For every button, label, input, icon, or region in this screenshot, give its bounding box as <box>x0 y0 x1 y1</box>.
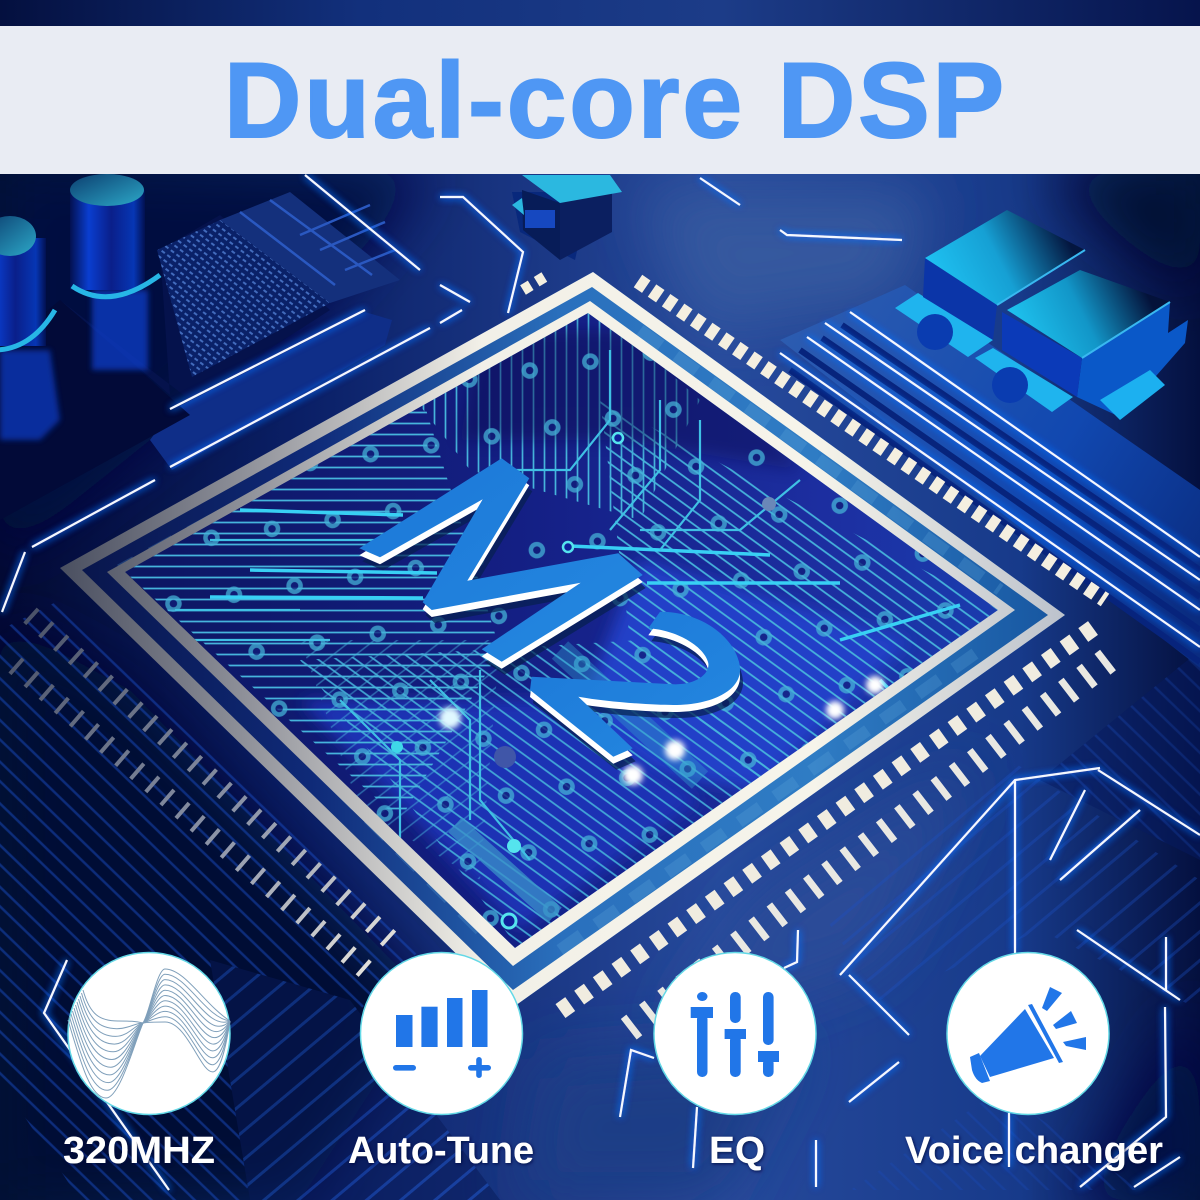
pins: all four chip sides <box>15 276 1108 1036</box>
title banner <box>0 26 1200 174</box>
logo white extrusion <box>359 465 740 764</box>
label: 320MHZ: 320MHZ <box>63 1130 215 1172</box>
inductor block, top center <box>512 175 622 260</box>
feature: 320MHZ <box>63 952 230 1172</box>
label: Voice changer: Voice changer <box>905 1130 1163 1172</box>
capacitors and memory block, upper left <box>0 174 400 520</box>
logo shadow <box>362 471 743 770</box>
letter M <box>359 458 643 662</box>
numeral 2 <box>530 612 740 757</box>
label: EQ: EQ <box>709 1130 765 1172</box>
icon: sliders <box>654 952 816 1114</box>
M2 logo on chip <box>359 458 743 770</box>
icon: level bars <box>360 952 522 1114</box>
inner frame <box>107 301 1015 966</box>
label: Auto-Tune: Auto-Tune <box>348 1130 534 1172</box>
feature: Voice changer <box>905 952 1163 1172</box>
icon: waveform <box>68 952 230 1114</box>
icon: megaphone <box>947 952 1109 1114</box>
chip substrate band <box>60 272 1065 1008</box>
lit component beads <box>391 433 884 928</box>
striped bus traces, upper right <box>780 285 1200 668</box>
inner panel traces <box>120 300 1010 960</box>
board traces: lower-left dark region <box>0 600 1200 1200</box>
heat sink blocks, upper right <box>895 210 1188 420</box>
feature: EQ <box>654 952 816 1172</box>
outer frame <box>60 272 1065 1008</box>
chip body <box>60 272 1065 1008</box>
title: Dual-core DSP <box>224 40 1004 160</box>
feature: Auto-Tune <box>348 952 534 1172</box>
inner panel <box>125 313 998 948</box>
